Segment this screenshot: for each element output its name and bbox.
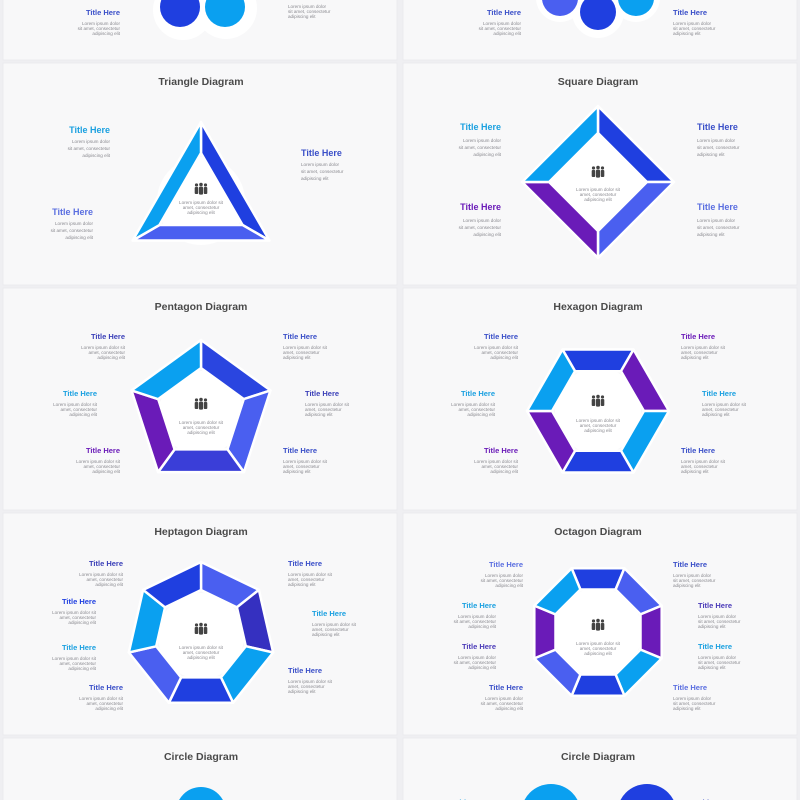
chart: heptagon — [129, 562, 273, 703]
heptagon labels: Lorem ipsum dolor sit — [312, 622, 357, 627]
octagon labels: Title Here — [673, 560, 707, 569]
heptagon labels: amet, consectetur — [59, 615, 96, 620]
octagon labels: adipiscing elit — [673, 583, 701, 588]
octagon labels: adipiscing elit — [698, 624, 726, 629]
hexagon labels: amet, consectetur — [681, 350, 718, 355]
text: amet, consectetur — [183, 425, 220, 430]
square labels: adipiscing elit — [473, 232, 502, 237]
panel: top-right circles: Title Here — [487, 8, 521, 17]
text: Lorem ipsum dolor sit — [179, 420, 224, 425]
heptagon labels: amet, consectetur — [86, 577, 123, 582]
octagon labels: Lorem ipsum dolor — [698, 655, 737, 660]
panel: top-left circles: Lorem ipsum dolor — [288, 4, 327, 9]
octagon labels: sit amet, consectetur — [454, 660, 496, 665]
heptagon labels: adipiscing elit — [95, 582, 124, 587]
center icons and text — [195, 166, 604, 635]
pentagon labels: Title Here — [283, 332, 317, 341]
octagon labels: sit amet, consectetur — [698, 660, 741, 665]
hexagon labels: Lorem ipsum dolor sit — [474, 345, 519, 350]
pentagon labels: Lorem ipsum dolor sit — [305, 402, 350, 407]
square labels: Title Here — [697, 122, 738, 132]
text: Lorem ipsum dolor sit — [179, 645, 224, 650]
pentagon labels: amet, consectetur — [88, 350, 125, 355]
octagon labels: adipiscing elit — [673, 706, 701, 711]
octagon labels: adipiscing elit — [698, 665, 726, 670]
text: adipiscing elit — [584, 651, 613, 656]
triangle labels: sit amet, consectetur — [301, 169, 344, 174]
heading: pentagon: Pentagon Diagram — [155, 301, 247, 313]
panel: top-right circles: Lorem ipsum dolor — [483, 21, 521, 26]
heptagon labels: Title Here — [62, 597, 96, 606]
text: Lorem ipsum dolor sit — [576, 418, 621, 423]
hexagon labels: adipiscing elit — [490, 355, 519, 360]
octagon labels: Lorem ipsum dolor — [673, 573, 712, 578]
panel: top-right circles: sit amet, consectetur — [479, 26, 521, 31]
triangle labels: sit amet, consectetur — [51, 228, 93, 233]
text: Lorem ipsum dolor sit — [576, 641, 621, 646]
text: amet, consectetur — [183, 205, 220, 210]
heptagon labels: Lorem ipsum dolor sit — [79, 696, 124, 701]
hexagon labels: Lorem ipsum dolor sit — [702, 402, 747, 407]
hexagon labels: adipiscing elit — [490, 469, 519, 474]
text: Lorem ipsum dolor sit — [576, 187, 621, 192]
text: amet, consectetur — [183, 650, 220, 655]
bottom circles — [176, 784, 732, 800]
square labels: Lorem ipsum dolor — [697, 218, 736, 223]
octagon labels: adipiscing elit — [495, 706, 524, 711]
hexagon labels: Title Here — [681, 446, 715, 455]
heptagon labels: Lorem ipsum dolor sit — [288, 572, 333, 577]
hexagon labels: amet, consectetur — [481, 350, 518, 355]
triangle labels: Lorem ipsum dolor — [301, 162, 340, 167]
triangle labels: Lorem ipsum dolor — [55, 221, 93, 226]
hexagon labels: Title Here — [681, 332, 715, 341]
pentagon labels: Lorem ipsum dolor sit — [81, 345, 126, 350]
square labels: sit amet, consectetur — [459, 145, 501, 150]
square labels: sit amet, consectetur — [697, 145, 740, 150]
octagon labels: Title Here — [673, 683, 707, 692]
pentagon labels: Title Here — [91, 332, 125, 341]
hexagon labels: Title Here — [484, 332, 518, 341]
text: amet, consectetur — [580, 423, 617, 428]
octagon labels: Title Here — [698, 601, 732, 610]
panel: top-right circles: adipiscing elit — [673, 31, 701, 36]
heading: triangle: Triangle Diagram — [158, 76, 244, 88]
chart: hexagon — [527, 350, 669, 472]
panel: top-left circles: Title Here — [86, 8, 120, 17]
pentagon labels: amet, consectetur — [83, 464, 120, 469]
heptagon labels: Lorem ipsum dolor sit — [52, 610, 97, 615]
hexagon labels: amet, consectetur — [681, 464, 718, 469]
pentagon labels — [53, 332, 350, 474]
octagon labels: adipiscing elit — [495, 583, 524, 588]
heading: circle diagram left: Circle Diagram — [164, 751, 238, 763]
triangle labels: Lorem ipsum dolor — [72, 139, 110, 144]
triangle labels — [51, 125, 344, 240]
heptagon labels: Title Here — [62, 643, 96, 652]
hexagon labels: adipiscing elit — [681, 469, 709, 474]
octagon labels: Lorem ipsum dolor — [485, 573, 523, 578]
text: adipiscing elit — [584, 197, 613, 202]
square labels: Lorem ipsum dolor — [697, 138, 736, 143]
heptagon labels: amet, consectetur — [59, 661, 96, 666]
heading: octagon: Octagon Diagram — [554, 526, 642, 538]
hexagon labels: Lorem ipsum dolor sit — [451, 402, 496, 407]
heptagon labels: Lorem ipsum dolor sit — [52, 656, 97, 661]
heptagon labels — [52, 559, 357, 711]
panel: top-right circles: Lorem ipsum dolor — [673, 21, 712, 26]
octagon labels: Lorem ipsum dolor — [458, 655, 496, 660]
pentagon labels: adipiscing elit — [283, 355, 311, 360]
heptagon labels: Title Here — [89, 559, 123, 568]
heading: heptagon: Heptagon Diagram — [154, 526, 248, 538]
text: adipiscing elit — [584, 428, 613, 433]
hexagon labels: adipiscing elit — [702, 412, 730, 417]
octagon labels: sit amet, consectetur — [698, 619, 741, 624]
panel: top-right circles: adipiscing elit — [493, 31, 522, 36]
panel: top-left circles: sit amet, consectetur — [288, 9, 331, 14]
panel: top-left circles: adipiscing elit — [92, 31, 121, 36]
heptagon labels: adipiscing elit — [288, 689, 316, 694]
square labels: sit amet, consectetur — [697, 225, 740, 230]
square labels: Lorem ipsum dolor — [463, 218, 501, 223]
octagon labels: Title Here — [489, 560, 523, 569]
octagon labels: sit amet, consectetur — [481, 578, 523, 583]
pentagon labels: adipiscing elit — [283, 469, 311, 474]
hexagon labels: amet, consectetur — [481, 464, 518, 469]
panel: top-right circles — [479, 0, 716, 38]
square labels: Title Here — [460, 122, 501, 132]
panel: top-left circles — [78, 0, 331, 40]
hexagon labels: amet, consectetur — [458, 407, 495, 412]
square labels: Title Here — [460, 202, 501, 212]
heptagon labels: amet, consectetur — [86, 701, 123, 706]
panel: top-left circles: adipiscing elit — [288, 14, 316, 19]
square labels: Title Here — [697, 202, 738, 212]
pentagon labels: Title Here — [305, 389, 339, 398]
chart: triangle — [133, 122, 269, 248]
chart: octagon — [534, 568, 662, 696]
square labels: sit amet, consectetur — [459, 225, 501, 230]
pentagon labels: adipiscing elit — [69, 412, 98, 417]
heptagon labels: Title Here — [312, 609, 346, 618]
hexagon labels: Lorem ipsum dolor sit — [681, 459, 726, 464]
triangle labels: Title Here — [301, 148, 342, 158]
pentagon labels: Title Here — [63, 389, 97, 398]
octagon labels: sit amet, consectetur — [673, 701, 716, 706]
heptagon labels: Title Here — [288, 666, 322, 675]
pentagon labels: Lorem ipsum dolor sit — [76, 459, 121, 464]
heptagon labels: adipiscing elit — [312, 632, 340, 637]
square labels: adipiscing elit — [697, 152, 725, 157]
octagon labels: Title Here — [462, 642, 496, 651]
panel: top-left circles: sit amet, consectetur — [78, 26, 120, 31]
heading: square: Square Diagram — [558, 76, 638, 88]
pentagon labels: adipiscing elit — [305, 412, 333, 417]
octagon labels: adipiscing elit — [468, 665, 497, 670]
hexagon labels: Lorem ipsum dolor sit — [681, 345, 726, 350]
chart: pentagon — [132, 340, 270, 472]
hexagon labels: adipiscing elit — [681, 355, 709, 360]
square labels: adipiscing elit — [697, 232, 725, 237]
pentagon labels: Title Here — [283, 446, 317, 455]
octagon labels: adipiscing elit — [468, 624, 497, 629]
octagon labels: sit amet, consectetur — [481, 701, 523, 706]
heptagon labels: adipiscing elit — [68, 620, 97, 625]
panel: top-right circles: Title Here — [673, 8, 707, 17]
triangle labels: adipiscing elit — [82, 153, 111, 158]
pentagon labels: Lorem ipsum dolor sit — [283, 345, 328, 350]
triangle labels: Title Here — [69, 125, 110, 135]
text: Lorem ipsum dolor sit — [179, 200, 224, 205]
heptagon labels: Lorem ipsum dolor sit — [288, 679, 333, 684]
chart: square — [522, 106, 674, 258]
panel: top-left circles: Lorem ipsum dolor — [82, 21, 120, 26]
pentagon labels: amet, consectetur — [283, 350, 320, 355]
hexagon labels: Title Here — [461, 389, 495, 398]
pentagon labels: amet, consectetur — [60, 407, 97, 412]
pentagon labels: amet, consectetur — [305, 407, 342, 412]
pentagon labels: adipiscing elit — [92, 469, 121, 474]
text: amet, consectetur — [580, 192, 617, 197]
square labels — [459, 122, 740, 237]
octagon labels: Title Here — [489, 683, 523, 692]
heptagon labels: Title Here — [288, 559, 322, 568]
square labels: adipiscing elit — [473, 152, 502, 157]
octagon labels: Lorem ipsum dolor — [698, 614, 737, 619]
hexagon labels: Lorem ipsum dolor sit — [474, 459, 519, 464]
heptagon labels: amet, consectetur — [288, 684, 325, 689]
text: adipiscing elit — [187, 430, 216, 435]
octagon labels: Lorem ipsum dolor — [485, 696, 523, 701]
heptagon labels: adipiscing elit — [68, 666, 97, 671]
text: adipiscing elit — [187, 210, 216, 215]
octagon labels: Lorem ipsum dolor — [458, 614, 496, 619]
square labels: Lorem ipsum dolor — [463, 138, 501, 143]
pentagon labels: Lorem ipsum dolor sit — [53, 402, 98, 407]
triangle labels: adipiscing elit — [65, 235, 94, 240]
heptagon labels: amet, consectetur — [288, 577, 325, 582]
text: amet, consectetur — [580, 646, 617, 651]
heptagon labels: Lorem ipsum dolor sit — [79, 572, 124, 577]
octagon labels: Title Here — [698, 642, 732, 651]
pentagon labels: Title Here — [86, 446, 120, 455]
hexagon labels: adipiscing elit — [467, 412, 496, 417]
octagon labels: sit amet, consectetur — [454, 619, 496, 624]
octagon labels: Title Here — [462, 601, 496, 610]
hexagon labels: amet, consectetur — [702, 407, 739, 412]
heptagon labels: adipiscing elit — [95, 706, 124, 711]
octagon labels: sit amet, consectetur — [673, 578, 716, 583]
pentagon labels: amet, consectetur — [283, 464, 320, 469]
heptagon labels: adipiscing elit — [288, 582, 316, 587]
hexagon labels: Title Here — [702, 389, 736, 398]
triangle labels: adipiscing elit — [301, 176, 329, 181]
heading: hexagon: Hexagon Diagram — [553, 301, 643, 313]
octagon labels — [454, 560, 741, 711]
heptagon labels: amet, consectetur — [312, 627, 349, 632]
pentagon labels: adipiscing elit — [97, 355, 126, 360]
text: adipiscing elit — [187, 655, 216, 660]
heptagon labels: Title Here — [89, 683, 123, 692]
pentagon labels: Lorem ipsum dolor sit — [283, 459, 328, 464]
heading: circle diagram right: Circle Diagram — [561, 751, 635, 763]
triangle labels: Title Here — [52, 207, 93, 217]
triangle labels: sit amet, consectetur — [68, 146, 110, 151]
hexagon labels: Title Here — [484, 446, 518, 455]
panel: top-right circles: sit amet, consectetur — [673, 26, 716, 31]
hexagon labels — [451, 332, 747, 474]
octagon labels: Lorem ipsum dolor — [673, 696, 712, 701]
